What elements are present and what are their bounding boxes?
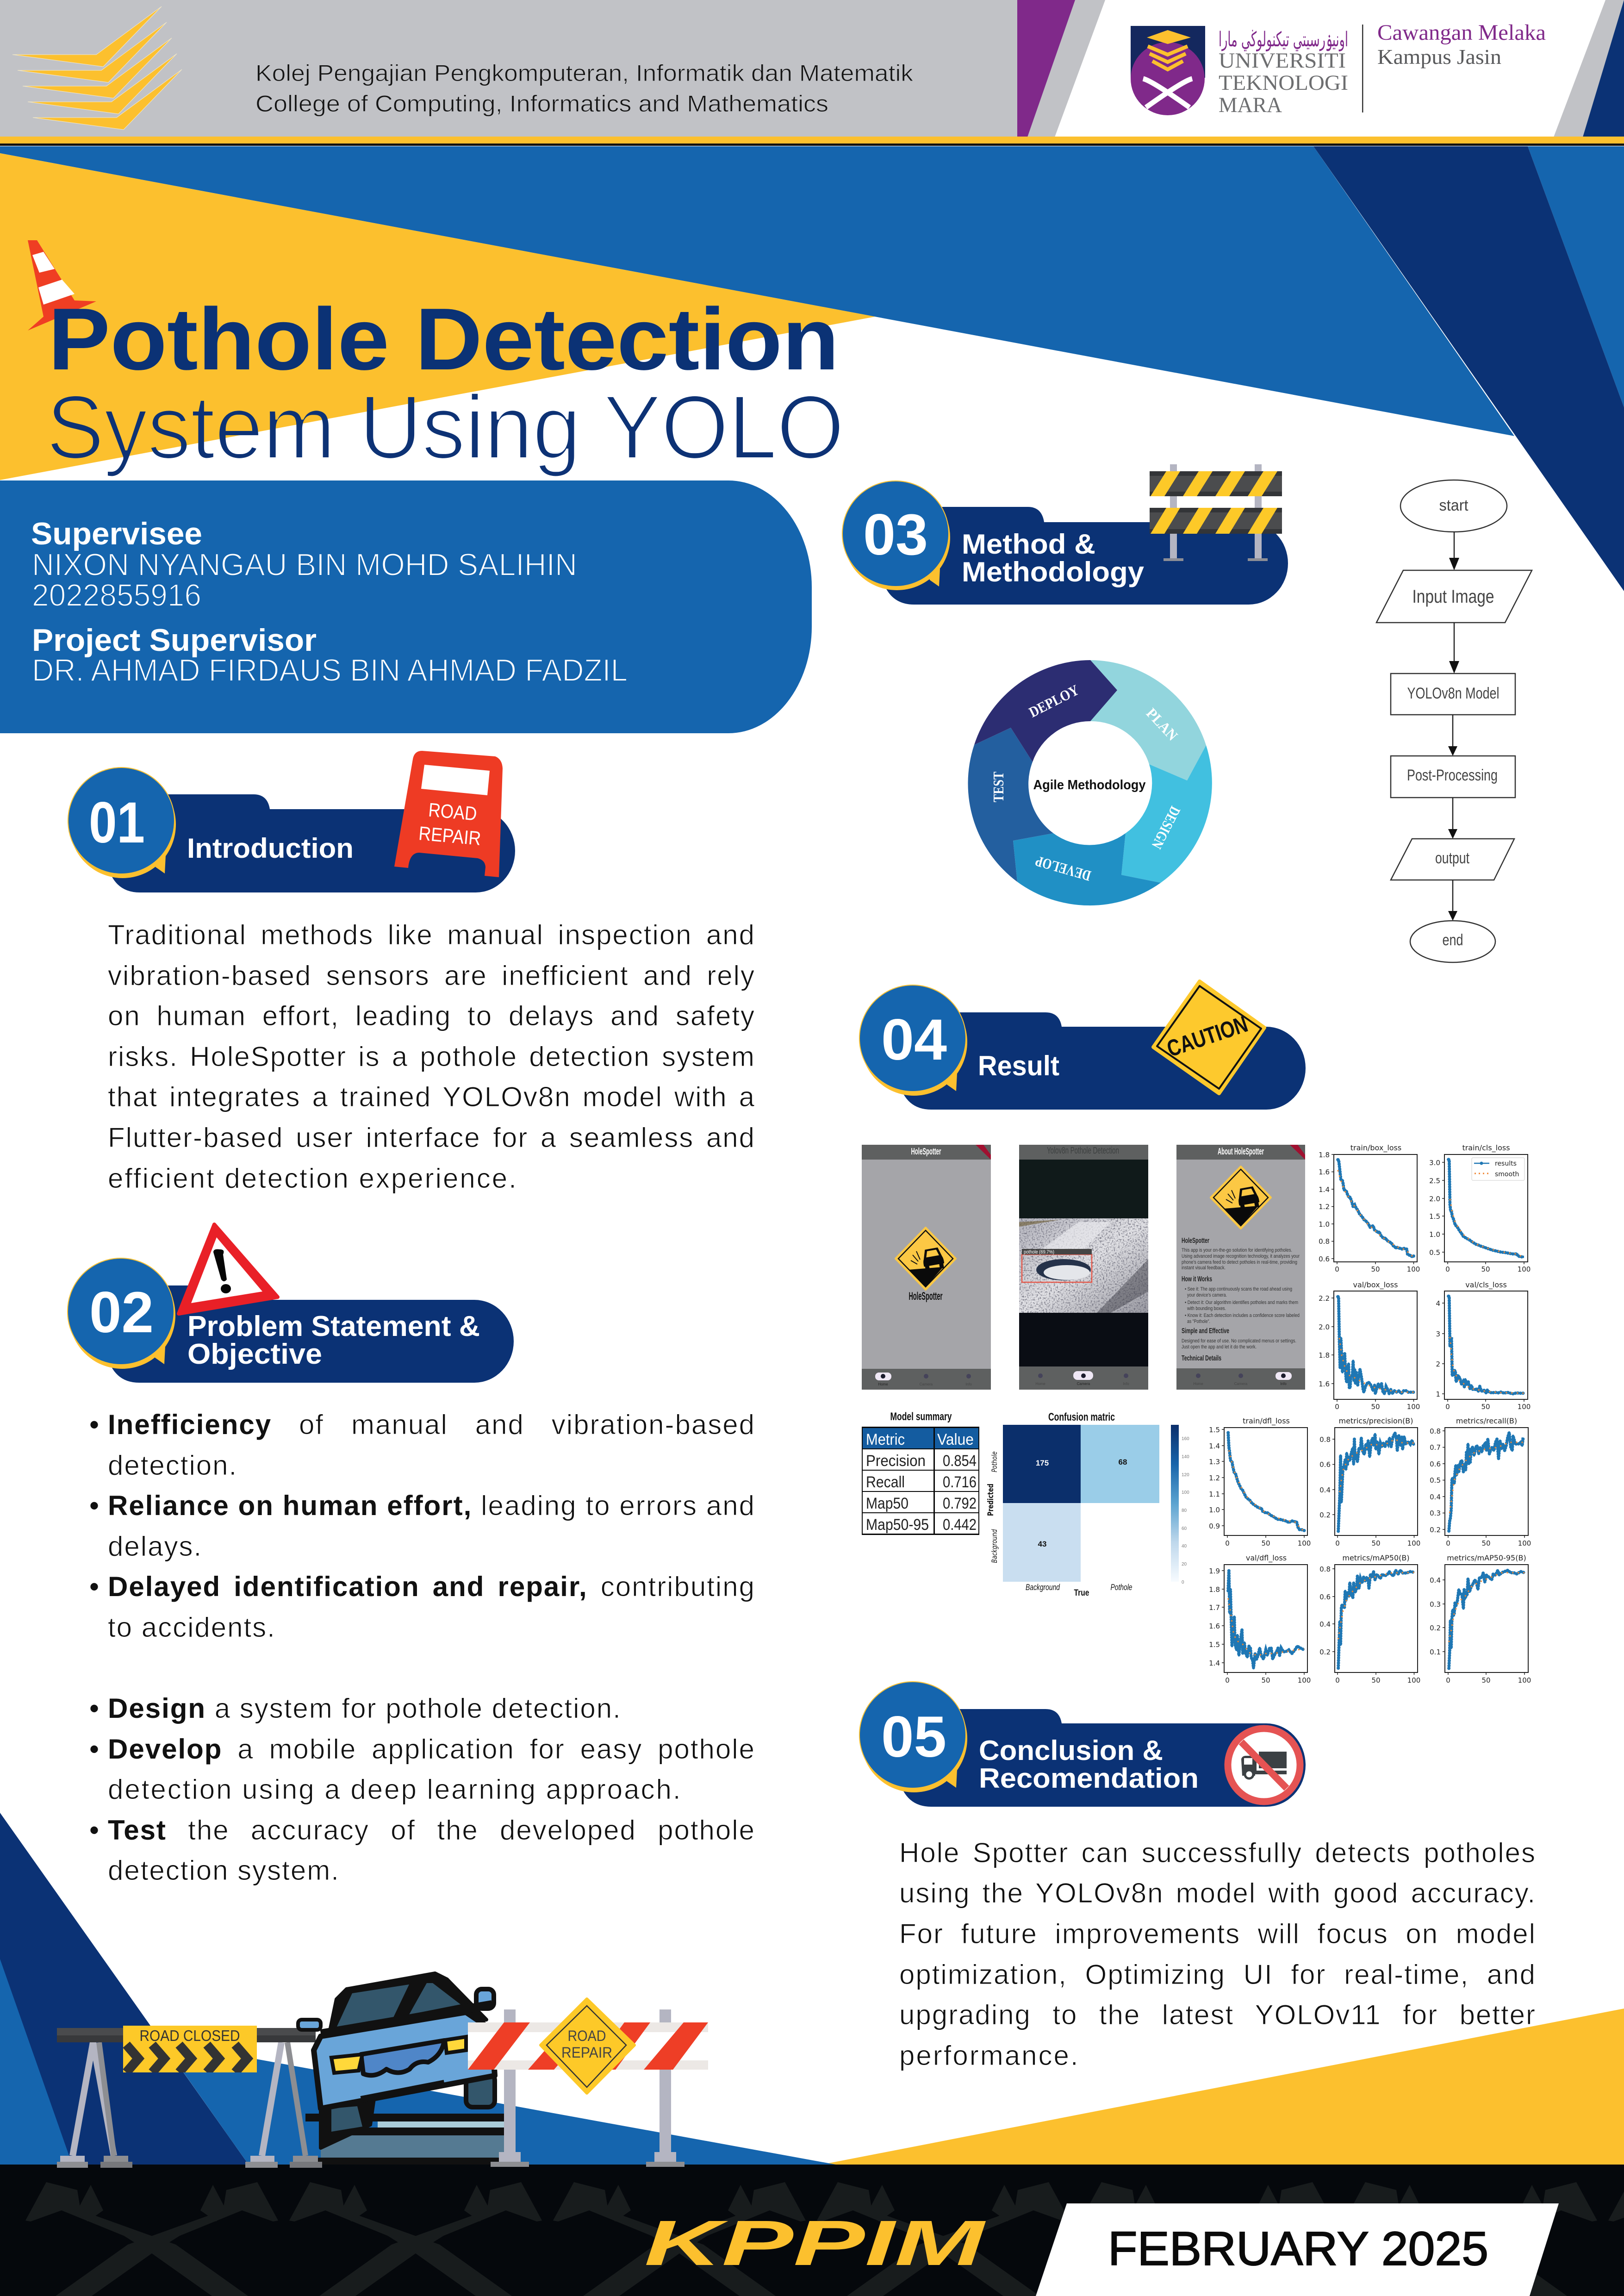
- chart: confusion matrix: Background: [990, 1529, 999, 1563]
- background: bottom left blue: [0, 1959, 72, 2165]
- text block: objective bullets: detection system.: [108, 1855, 340, 1886]
- phone screenshot: camera detection: [1019, 1145, 1148, 1390]
- chart: confusion matrix: Predicted: [986, 1484, 996, 1516]
- college name: Kolej Pengajian Pengkomputeran, Informatik dan Matematik: [255, 60, 914, 86]
- text block: objective bullets: Develop a mobile application for easy pothole: [108, 1734, 755, 1765]
- table: model summary: 0.792: [943, 1495, 977, 1512]
- chart: val/dfl_loss: val/dfl_loss: [1246, 1554, 1287, 1563]
- segment: plan: [1090, 660, 1206, 780]
- chart: val/cls_loss: val/cls_loss: [1465, 1280, 1507, 1290]
- phone screenshot: about: Technical Details: [1182, 1354, 1221, 1362]
- chart: agile methodology wheel: Agile Methodology: [1033, 778, 1146, 792]
- chart: metrics/recall(B): 0.5: [1430, 1476, 1441, 1485]
- chart: train/dfl_loss: 1.0: [1209, 1506, 1220, 1514]
- chart: metrics/mAP50-95(B): 0.4: [1430, 1576, 1441, 1585]
- chart: confusion matrix: 68: [1119, 1458, 1127, 1466]
- chart: confusion matrix: 175: [1036, 1459, 1049, 1467]
- text block: conclusion: using the YOLOv8n model with good accuracy.: [899, 1878, 1536, 1909]
- chart: train/box_loss: [1319, 1143, 1420, 1273]
- section heading 05: 05: [881, 1705, 946, 1769]
- icon: road repair sign: ROAD: [428, 799, 478, 824]
- panel: supervisee and supervisor: 2022855916: [32, 578, 201, 613]
- chart: train/box_loss: 1.8: [1319, 1151, 1330, 1159]
- panel: supervisee and supervisor: Supervisee: [31, 516, 202, 551]
- phone screenshot: about: • Know it: Each detection includes a confidence score labeled: [1185, 1313, 1300, 1318]
- footer label: KPPIM: KPPIM: [644, 2208, 986, 2279]
- text block: introduction: Traditional methods like manual inspection and: [108, 919, 755, 950]
- chart: flowchart: end: [1442, 931, 1463, 949]
- UiTM logo: [1131, 20, 1546, 117]
- chart: metrics/mAP50(B): 0.8: [1319, 1565, 1331, 1573]
- section heading 01: 01: [89, 791, 145, 855]
- panel: supervisee and supervisor: NIXON NYANGAU BIN MOHD SALIHIN: [32, 547, 577, 582]
- UiTM logo: Cawangan Melaka: [1377, 20, 1546, 45]
- chart: train/dfl_loss: 1.1: [1209, 1490, 1220, 1498]
- chart: metrics/mAP50-95(B): 0.2: [1430, 1624, 1441, 1632]
- section heading 03: Method &: [962, 529, 1095, 560]
- table: model summary: 0.716: [943, 1473, 977, 1491]
- text block: introduction: [108, 915, 755, 1188]
- text block: conclusion: upgrading to the latest YOLOv11 for better: [899, 1999, 1536, 2030]
- table: model summary: 0.442: [943, 1516, 977, 1534]
- phone screenshot: about: [1176, 1145, 1305, 1390]
- text: •: [89, 1571, 100, 1602]
- segment: design: DESIGN: [1149, 804, 1184, 852]
- chart: train/dfl_loss: [1209, 1416, 1311, 1547]
- chart: train/cls_loss: 50: [1481, 1265, 1490, 1273]
- chart: confusion matrix: True: [1074, 1588, 1089, 1598]
- chart: val/cls_loss: 2: [1436, 1360, 1440, 1368]
- icon: no trucks sign: [1228, 1728, 1300, 1802]
- chart: val/box_loss: [1319, 1280, 1420, 1411]
- text block: objective bullets: detection using a deep learning approach.: [108, 1774, 682, 1805]
- background: bottom right yellow: [812, 2009, 1624, 2166]
- chart: val/cls_loss: 1: [1436, 1390, 1440, 1398]
- icon: traffic cone: [28, 240, 96, 331]
- text: •: [89, 1490, 100, 1521]
- chart: val/cls_loss: [1436, 1280, 1531, 1411]
- chart: val/box_loss: 50: [1371, 1403, 1380, 1411]
- section heading 03: 03: [863, 503, 928, 567]
- chart: metrics/mAP50-95(B): 50: [1481, 1676, 1491, 1685]
- panel: supervisee and supervisor: [0, 480, 812, 733]
- chart: train/dfl_loss: 100: [1298, 1539, 1311, 1547]
- chart: metrics/recall(B): 0.2: [1430, 1526, 1441, 1534]
- chart: train/cls_loss: 2.5: [1429, 1177, 1440, 1185]
- text block: problem statement bullets: [108, 1404, 755, 1648]
- chart: metrics/precision(B): 0.4: [1319, 1486, 1331, 1494]
- text block: introduction: on human effort, leading to delays and safety: [108, 1000, 755, 1031]
- phone screenshot: camera detection: Home: [1035, 1382, 1045, 1386]
- chart: confusion matrix: 60: [1182, 1526, 1187, 1531]
- section heading 04: Result: [978, 1050, 1059, 1081]
- chart: flowchart: Post-Processing: [1407, 767, 1498, 784]
- chart: flowchart: Input Image: [1412, 586, 1494, 607]
- chart: val/dfl_loss: 50: [1261, 1676, 1270, 1685]
- chart: train/cls_loss: 0.5: [1429, 1248, 1440, 1257]
- legend: results: [1495, 1160, 1517, 1167]
- background: navy wedge: [1313, 146, 1624, 591]
- table: model summary: Recall: [866, 1473, 905, 1491]
- icon: caution diamond: CAUTION: [1164, 1011, 1251, 1062]
- chart: metrics/precision(B): [1319, 1416, 1420, 1547]
- text: •: [89, 1734, 100, 1765]
- chart: confusion matrix: 43: [1038, 1540, 1046, 1548]
- chart: metrics/mAP50(B): 0.6: [1319, 1593, 1331, 1601]
- phone screenshot: about: Just open the app and let it do the work.: [1182, 1344, 1257, 1350]
- chart: train/box_loss: 1.4: [1319, 1185, 1330, 1194]
- table: model summary: Map50-95: [866, 1516, 929, 1534]
- text block: problem statement bullets: Inefficiency of manual and vibration-based: [108, 1409, 755, 1440]
- segment: develop: [1013, 833, 1161, 905]
- icon: caution diamond: [1153, 981, 1264, 1093]
- chart: metrics/precision(B): 0.6: [1319, 1460, 1331, 1469]
- background: blue diagonal: [0, 146, 1514, 436]
- section heading 01: Introduction: [187, 833, 354, 864]
- text block: introduction: Flutter-based user interface for a seamless and: [108, 1122, 755, 1153]
- chart: val/box_loss: val/box_loss: [1353, 1280, 1398, 1290]
- chart: train/dfl_loss: 1.5: [1209, 1426, 1220, 1434]
- chart: confusion matrix: Background: [1026, 1583, 1060, 1592]
- chart: confusion matrix: 0: [1182, 1580, 1184, 1585]
- chart: val/dfl_loss: 1.4: [1209, 1659, 1220, 1667]
- chart: train/cls_loss: 1.0: [1429, 1230, 1440, 1239]
- chart: train/cls_loss: 0: [1445, 1265, 1450, 1273]
- chart: confusion matrix: 40: [1182, 1544, 1187, 1549]
- section heading 05: Recomendation: [979, 1763, 1199, 1794]
- chart: metrics/recall(B): [1430, 1416, 1531, 1547]
- section heading 02: [68, 1224, 514, 1383]
- phone screenshot: home: HoleSpotter: [909, 1290, 942, 1303]
- segment: develop: DEVELOP: [1033, 853, 1093, 885]
- phone screenshot: home: Info: [965, 1382, 972, 1386]
- college name: College of Computing, Informatics and Mathematics: [255, 91, 828, 117]
- chart: train/cls_loss: 1.5: [1429, 1212, 1440, 1221]
- chart: confusion matrix: 20: [1182, 1562, 1187, 1567]
- phone screenshot: about: • Detect it: Our algorithm identifies potholes and marks them: [1185, 1300, 1298, 1305]
- chart: metrics/mAP50(B): [1319, 1554, 1420, 1685]
- chart: val/box_loss: 2.2: [1319, 1294, 1330, 1303]
- chart: train/cls_loss: 100: [1518, 1265, 1531, 1273]
- chart: metrics/recall(B): 0.4: [1430, 1493, 1441, 1501]
- chart: val/box_loss: 1.8: [1319, 1351, 1330, 1360]
- section heading 05: [859, 1682, 1306, 1807]
- chart: metrics/precision(B): 0.8: [1319, 1435, 1331, 1444]
- UiTM logo: Kampus Jasin: [1377, 45, 1501, 69]
- text block: objective bullets: Test the accuracy of the developed pothole: [108, 1815, 755, 1846]
- segment: design: [1121, 745, 1212, 883]
- panel: supervisee and supervisor: Project Supervisor: [32, 623, 317, 658]
- illustration: pothole under car: [305, 2114, 504, 2165]
- segment: test: TEST: [990, 772, 1007, 802]
- table: model summary: Metric: [866, 1431, 905, 1448]
- chart: val/cls_loss: 50: [1481, 1403, 1490, 1411]
- legend: smooth: [1495, 1171, 1519, 1178]
- table: model summary: Map50: [866, 1495, 908, 1512]
- section heading 01: [68, 751, 515, 892]
- chart: train/dfl_loss: 50: [1261, 1539, 1270, 1547]
- illustration: car falling in pothole: [298, 1973, 495, 2148]
- UiTM logo: TEKNOLOGI: [1219, 71, 1348, 95]
- chart: agile methodology wheel: [968, 660, 1212, 905]
- title: [46, 290, 844, 478]
- phone screenshot: about: HoleSpotter: [1182, 1237, 1209, 1245]
- chart: confusion matrix: 100: [1182, 1490, 1189, 1495]
- road photo: [1019, 1218, 1148, 1313]
- background: yellow triangle: [0, 153, 875, 480]
- chart: train/box_loss: 1.0: [1319, 1220, 1330, 1229]
- text block: problem statement bullets: Delayed identification and repair, contributing: [108, 1571, 755, 1602]
- text block: objective bullets: [108, 1688, 755, 1892]
- phone screenshot: camera detection: Camera: [1077, 1382, 1090, 1386]
- chart: flowchart: start: [1439, 497, 1468, 514]
- chart: val/dfl_loss: 1.8: [1209, 1585, 1220, 1594]
- table: model summary: Model summary: [890, 1410, 952, 1423]
- section heading 05: Conclusion &: [979, 1735, 1163, 1766]
- chart: metrics/precision(B): 0.2: [1319, 1511, 1331, 1519]
- table: model summary: 0.854: [943, 1452, 977, 1470]
- table: model summary: Value: [937, 1431, 974, 1448]
- text: •: [89, 1409, 100, 1440]
- footer date box: FEBRUARY 2025: [1108, 2222, 1488, 2275]
- chart: train/box_loss: train/box_loss: [1350, 1143, 1401, 1153]
- footer band: [0, 2165, 1624, 2296]
- chart: train/box_loss: 100: [1407, 1265, 1420, 1273]
- text block: conclusion: [899, 1833, 1536, 2077]
- chart: val/box_loss: 0: [1335, 1403, 1339, 1411]
- chart: metrics/recall(B): metrics/recall(B): [1456, 1416, 1517, 1425]
- text block: problem statement bullets: Reliance on human effort, leading to errors and: [108, 1490, 755, 1521]
- text block: introduction: that integrates a trained YOLOv8n model with a: [108, 1081, 755, 1112]
- chart: metrics/mAP50(B): 100: [1407, 1676, 1420, 1685]
- phone screenshot: about: your device's camera.: [1187, 1292, 1227, 1298]
- illustration: road closed barrier: [57, 2026, 322, 2168]
- text block: problem statement bullets: delays.: [108, 1531, 202, 1562]
- chart: val/box_loss: 100: [1407, 1403, 1420, 1411]
- chart: metrics/recall(B): 50: [1481, 1539, 1491, 1547]
- chart: metrics/recall(B): 0.8: [1430, 1427, 1441, 1435]
- icon: road repair sign: REPAIR: [418, 822, 482, 849]
- road photo: pothole (69.7%): [1024, 1249, 1054, 1255]
- chart: val/box_loss: 2.0: [1319, 1323, 1330, 1331]
- section heading 03: Methodology: [962, 556, 1145, 587]
- chart: train/box_loss: 50: [1371, 1265, 1380, 1273]
- text: •: [89, 1693, 100, 1724]
- chart: confusion matrix: 160: [1182, 1436, 1189, 1441]
- text block: introduction: risks. HoleSpotter is a pothole detection system: [108, 1041, 755, 1072]
- text block: problem statement bullets: detection.: [108, 1450, 237, 1481]
- text block: conclusion: Hole Spotter can successfully detects potholes: [899, 1837, 1536, 1868]
- phone screenshot: home: HoleSpotter: [911, 1147, 941, 1157]
- chart: metrics/precision(B): 100: [1407, 1539, 1420, 1547]
- chart: train/cls_loss: 2.0: [1429, 1195, 1440, 1203]
- chart: flowchart: [1376, 480, 1532, 962]
- phone screenshot: about: Info: [1280, 1382, 1287, 1386]
- segment: test: [968, 728, 1053, 882]
- section heading 02: 02: [89, 1280, 154, 1345]
- chart: train/box_loss: 1.2: [1319, 1203, 1330, 1211]
- chart: train/dfl_loss: train/dfl_loss: [1243, 1416, 1290, 1426]
- chart: metrics/mAP50-95(B): 0: [1446, 1676, 1450, 1685]
- icon: warning triangle: [179, 1224, 278, 1314]
- background: right blue wedge: [1528, 146, 1624, 407]
- title: Pothole Detection: [48, 290, 839, 388]
- chart: flowchart: YOLOv8n Model: [1407, 685, 1500, 702]
- chart: metrics/recall(B): 0.7: [1430, 1443, 1441, 1452]
- chart: metrics/mAP50-95(B): [1430, 1554, 1531, 1685]
- phone screenshot: about: About HoleSpotter: [1218, 1147, 1264, 1157]
- chart: train/box_loss: 0.6: [1319, 1255, 1330, 1263]
- chart: val/dfl_loss: 0: [1225, 1676, 1230, 1685]
- college name: [255, 60, 914, 117]
- background: bottom centre blue: [162, 2042, 836, 2165]
- chart: metrics/mAP50(B): metrics/mAP50(B): [1342, 1554, 1410, 1562]
- phone screenshot: home: Camera: [920, 1382, 933, 1386]
- phone screenshot: about: Designed for ease of use. No complicated menus or settings.: [1182, 1338, 1296, 1344]
- chart: confusion matrix: Pothole: [990, 1451, 999, 1472]
- chart: metrics/recall(B): 0.3: [1430, 1509, 1441, 1517]
- segment: plan: PLAN: [1143, 705, 1181, 744]
- chart: val/cls_loss: 0: [1445, 1403, 1450, 1411]
- text block: introduction: vibration-based sensors are inefficient and rely: [108, 960, 755, 991]
- chart: confusion matrix: [986, 1411, 1189, 1598]
- chart: metrics/recall(B): 100: [1518, 1539, 1531, 1547]
- phone screenshot: about: How it Works: [1182, 1275, 1212, 1283]
- chart: train/box_loss: 0.8: [1319, 1237, 1330, 1246]
- phone screenshot: camera detection: Info: [1123, 1382, 1129, 1386]
- section heading 02: Objective: [187, 1338, 322, 1370]
- chart: confusion matrix: 80: [1182, 1508, 1187, 1513]
- chart: flowchart: output: [1435, 849, 1469, 867]
- chart: confusion matrix: 140: [1182, 1454, 1189, 1460]
- illustration: road closed barrier: ROAD CLOSED: [140, 2027, 240, 2044]
- chart: train/dfl_loss: 0: [1225, 1539, 1230, 1547]
- UiTM logo: UNIVERSITI: [1219, 49, 1346, 73]
- phone screenshot: about: with bounding boxes.: [1187, 1306, 1226, 1311]
- text block: conclusion: optimization, Optimizing UI for real-time, and: [899, 1959, 1536, 1990]
- chart: metrics/mAP50-95(B): 0.1: [1430, 1648, 1441, 1656]
- chart: confusion matrix: Confusion matric: [1048, 1411, 1115, 1423]
- chart: val/dfl_loss: 1.5: [1209, 1641, 1220, 1649]
- phone screenshot: camera detection: Yolov8n Pothole Detection: [1047, 1146, 1119, 1156]
- chart: train/dfl_loss: 1.3: [1209, 1458, 1220, 1466]
- phone screenshot: about: as "Pothole".: [1187, 1319, 1210, 1324]
- phone screenshot: about: instant visual feedback.: [1182, 1265, 1226, 1271]
- segment: deploy: [974, 660, 1117, 762]
- title: System Using YOLO: [46, 377, 844, 478]
- chart: metrics/precision(B): 50: [1371, 1539, 1381, 1547]
- chart: metrics/mAP50(B): 0: [1335, 1676, 1340, 1685]
- icon: road repair sign: [394, 751, 503, 877]
- chart: metrics/mAP50(B): 0.4: [1319, 1620, 1331, 1628]
- chart: train/dfl_loss: 0.9: [1209, 1522, 1220, 1530]
- phone screenshot: about: Simple and Effective: [1182, 1327, 1229, 1335]
- text block: conclusion: performance.: [899, 2040, 1079, 2071]
- section heading 03: [842, 464, 1288, 605]
- background: bottom left navy: [0, 1813, 249, 2165]
- segment: deploy: DEPLOY: [1026, 681, 1082, 721]
- chart: val/dfl_loss: 1.7: [1209, 1603, 1220, 1612]
- table: model summary: Precision: [866, 1452, 926, 1470]
- chart: metrics/mAP50-95(B): metrics/mAP50-95(B): [1447, 1554, 1526, 1562]
- table: model summary: [862, 1410, 979, 1535]
- phone screenshot: about: Camera: [1234, 1382, 1248, 1386]
- chart: metrics/mAP50-95(B): 100: [1518, 1676, 1531, 1685]
- phone screenshot: about: This app is your on-the-go solution for identifying potholes.: [1182, 1248, 1292, 1253]
- chart: train/dfl_loss: 1.2: [1209, 1474, 1220, 1482]
- illustration: road repair barricade: ROAD: [567, 2028, 606, 2044]
- chart: val/cls_loss: 4: [1436, 1299, 1440, 1308]
- chart: val/cls_loss: 3: [1436, 1330, 1440, 1338]
- phone screenshot: about: Home: [1193, 1382, 1203, 1386]
- UiTM logo: MARA: [1219, 93, 1282, 117]
- icon: striped barricade: [1150, 464, 1282, 561]
- phone screenshot: about: Using advanced image recognition technology, it analyzes your: [1182, 1254, 1300, 1259]
- chart: metrics/precision(B): 0: [1335, 1539, 1340, 1547]
- chart: confusion matrix: 120: [1182, 1472, 1189, 1478]
- chart: train/dfl_loss: 1.4: [1209, 1442, 1220, 1450]
- footer date box: [1036, 2203, 1559, 2296]
- text block: conclusion: For future improvements will focus on model: [899, 1918, 1536, 1949]
- section heading 04: [859, 981, 1306, 1110]
- chart: metrics/recall(B): 0: [1446, 1539, 1450, 1547]
- chart: train/box_loss: 1.6: [1319, 1168, 1330, 1176]
- section heading 04: 04: [881, 1008, 947, 1072]
- chart: train/cls_loss: [1429, 1143, 1531, 1273]
- text block: objective bullets: Design a system for pothole detection.: [108, 1693, 622, 1724]
- chart: train/cls_loss: train/cls_loss: [1462, 1143, 1510, 1153]
- chart: metrics/mAP50(B): 0.2: [1319, 1648, 1331, 1656]
- illustration: road repair barricade: REPAIR: [561, 2044, 612, 2061]
- chart: confusion matrix: Pothole: [1111, 1583, 1132, 1592]
- chart: train/box_loss: 0: [1335, 1265, 1339, 1273]
- chart: metrics/mAP50-95(B): 0.3: [1430, 1600, 1441, 1609]
- chart: metrics/recall(B): 0.6: [1430, 1460, 1441, 1468]
- chart: metrics/mAP50(B): 50: [1371, 1676, 1381, 1685]
- illustration: road repair barricade: [468, 1999, 708, 2167]
- chart: val/dfl_loss: 1.9: [1209, 1567, 1220, 1575]
- section heading 02: Problem Statement &: [187, 1310, 480, 1342]
- panel: supervisee and supervisor: DR. AHMAD FIRDAUS BIN AHMAD FADZIL: [32, 653, 628, 688]
- icon: pothole sign: [896, 1228, 956, 1290]
- college chevron logo: [12, 6, 182, 130]
- header band: [0, 0, 1624, 146]
- chart: val/dfl_loss: 1.6: [1209, 1622, 1220, 1630]
- text block: introduction: efficient detection experience.: [108, 1163, 518, 1194]
- text block: problem statement bullets: to accidents.: [108, 1612, 276, 1643]
- chart: val/cls_loss: 100: [1518, 1403, 1531, 1411]
- legend: [1472, 1158, 1524, 1180]
- phone screenshot: about: • See it: The app continuously scans the road ahead using: [1185, 1286, 1292, 1292]
- phone screenshot: about: phone's camera feed to detect potholes in real-time, providing: [1182, 1260, 1297, 1265]
- chart: metrics/precision(B): metrics/precision(B): [1339, 1416, 1413, 1425]
- chart: train/cls_loss: 3.0: [1429, 1159, 1440, 1167]
- text: •: [89, 1815, 100, 1846]
- phone screenshot: home: Home: [878, 1382, 888, 1386]
- icon: pothole sign: [1211, 1167, 1271, 1229]
- chart: val/box_loss: 1.6: [1319, 1380, 1330, 1388]
- phone screenshot: home: [862, 1145, 991, 1390]
- chart: val/dfl_loss: [1209, 1554, 1311, 1685]
- chart: val/dfl_loss: 100: [1298, 1676, 1311, 1685]
- UiTM logo: اونيۏرسيتي تيكنولوڬي مارا: [1219, 28, 1348, 51]
